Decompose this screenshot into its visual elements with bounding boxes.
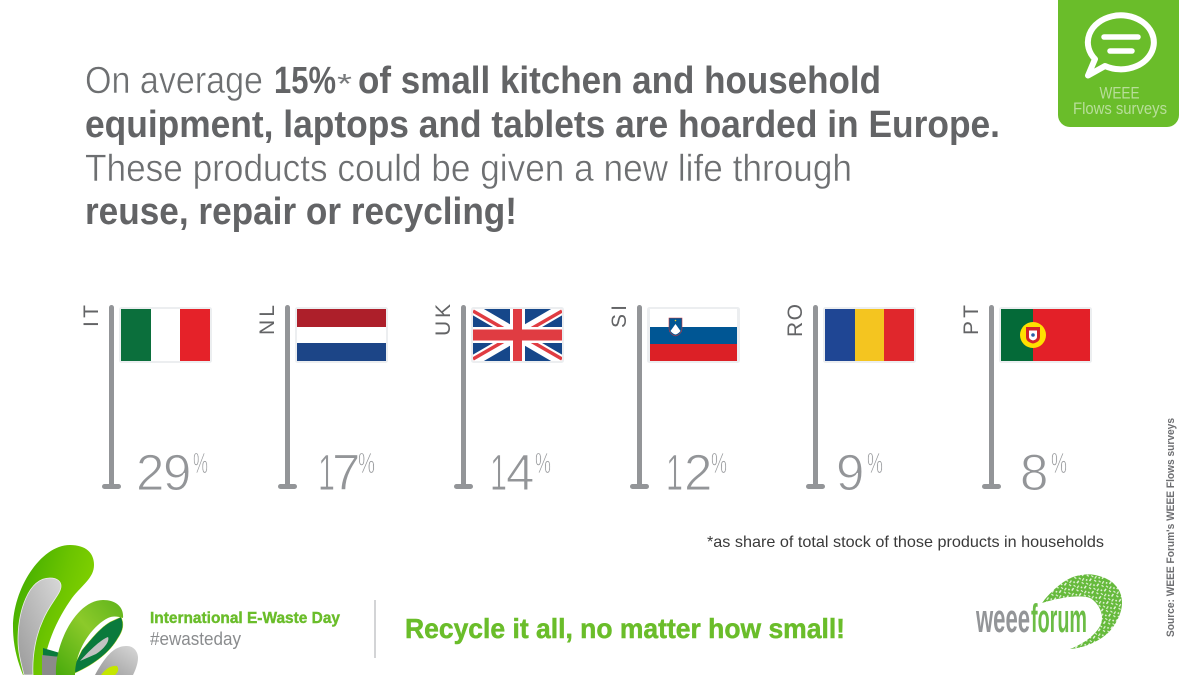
flag: Italy 29% [80, 305, 212, 501]
headline: On average [85, 60, 263, 102]
flag: Romania 9% [784, 304, 916, 501]
hashtag: #ewasteday [150, 629, 241, 649]
logo: WEEE Forum: forum [1031, 597, 1087, 641]
flag: Netherlands 17%: 7 [332, 444, 360, 501]
flag: Slovenia 12%: SI [608, 305, 631, 328]
logo: WEEE Forum: weee [975, 597, 1030, 641]
flag: Slovenia 12%: % [711, 448, 727, 480]
flag: United Kingdom 14%: 4 [506, 444, 534, 501]
flag: United Kingdom 14%: UK [432, 304, 455, 336]
flag: Portugal 8%: 8 [1020, 444, 1048, 501]
headline: 15% [274, 60, 336, 102]
source note: Source: WEEE Forum's WEEE Flows surveys [1165, 418, 1177, 637]
flag: United Kingdom 14% [432, 304, 564, 501]
badge label: Flows surveys [1073, 100, 1167, 118]
headline: These products could be given a new life through [85, 148, 852, 190]
flag: Italy 29%: % [193, 448, 208, 480]
icon: speech bubble [1088, 15, 1154, 76]
flag: Italy 29%: IT [80, 305, 103, 327]
flag: Romania 9%: RO [784, 304, 807, 337]
slogan: Recycle it all, no matter how small! [405, 613, 845, 644]
badge label: WEEE [1100, 84, 1140, 102]
flag: Netherlands 17%: % [358, 448, 375, 480]
headline: of small kitchen and household [358, 60, 881, 102]
badge: WEEE Flows surveys [1058, 0, 1179, 127]
headline [85, 60, 1000, 233]
flag: Romania 9%: % [867, 448, 883, 480]
flag: Italy 29%: 29 [136, 444, 191, 501]
flag: Netherlands 17%: 1 [318, 444, 335, 501]
headline: * [337, 68, 352, 99]
logo: WEEE Forum [975, 574, 1122, 649]
flag: Portugal 8% [960, 305, 1092, 501]
headline: reuse, repair or recycling! [85, 191, 517, 233]
flag: Slovenia 12% [608, 305, 740, 501]
flag: Portugal 8%: % [1051, 448, 1067, 480]
headline: equipment, laptops and tablets are hoarded in Europe. [85, 104, 1000, 146]
flag: Slovenia 12%: 1 [666, 444, 683, 501]
flag: United Kingdom 14%: % [535, 448, 551, 480]
flag: United Kingdom 14%: 1 [490, 444, 507, 501]
event title: International E-Waste Day [150, 610, 340, 627]
flag: Romania 9%: 9 [836, 444, 864, 501]
logo: International E-Waste Day swirl [13, 545, 138, 675]
flag: Netherlands 17%: NL [256, 305, 279, 335]
flag: Netherlands 17% [256, 305, 388, 501]
flag: Slovenia 12%: 2 [684, 444, 712, 501]
footnote: *as share of total stock of those products in households [707, 534, 1104, 551]
flag: Portugal 8%: PT [960, 305, 983, 335]
